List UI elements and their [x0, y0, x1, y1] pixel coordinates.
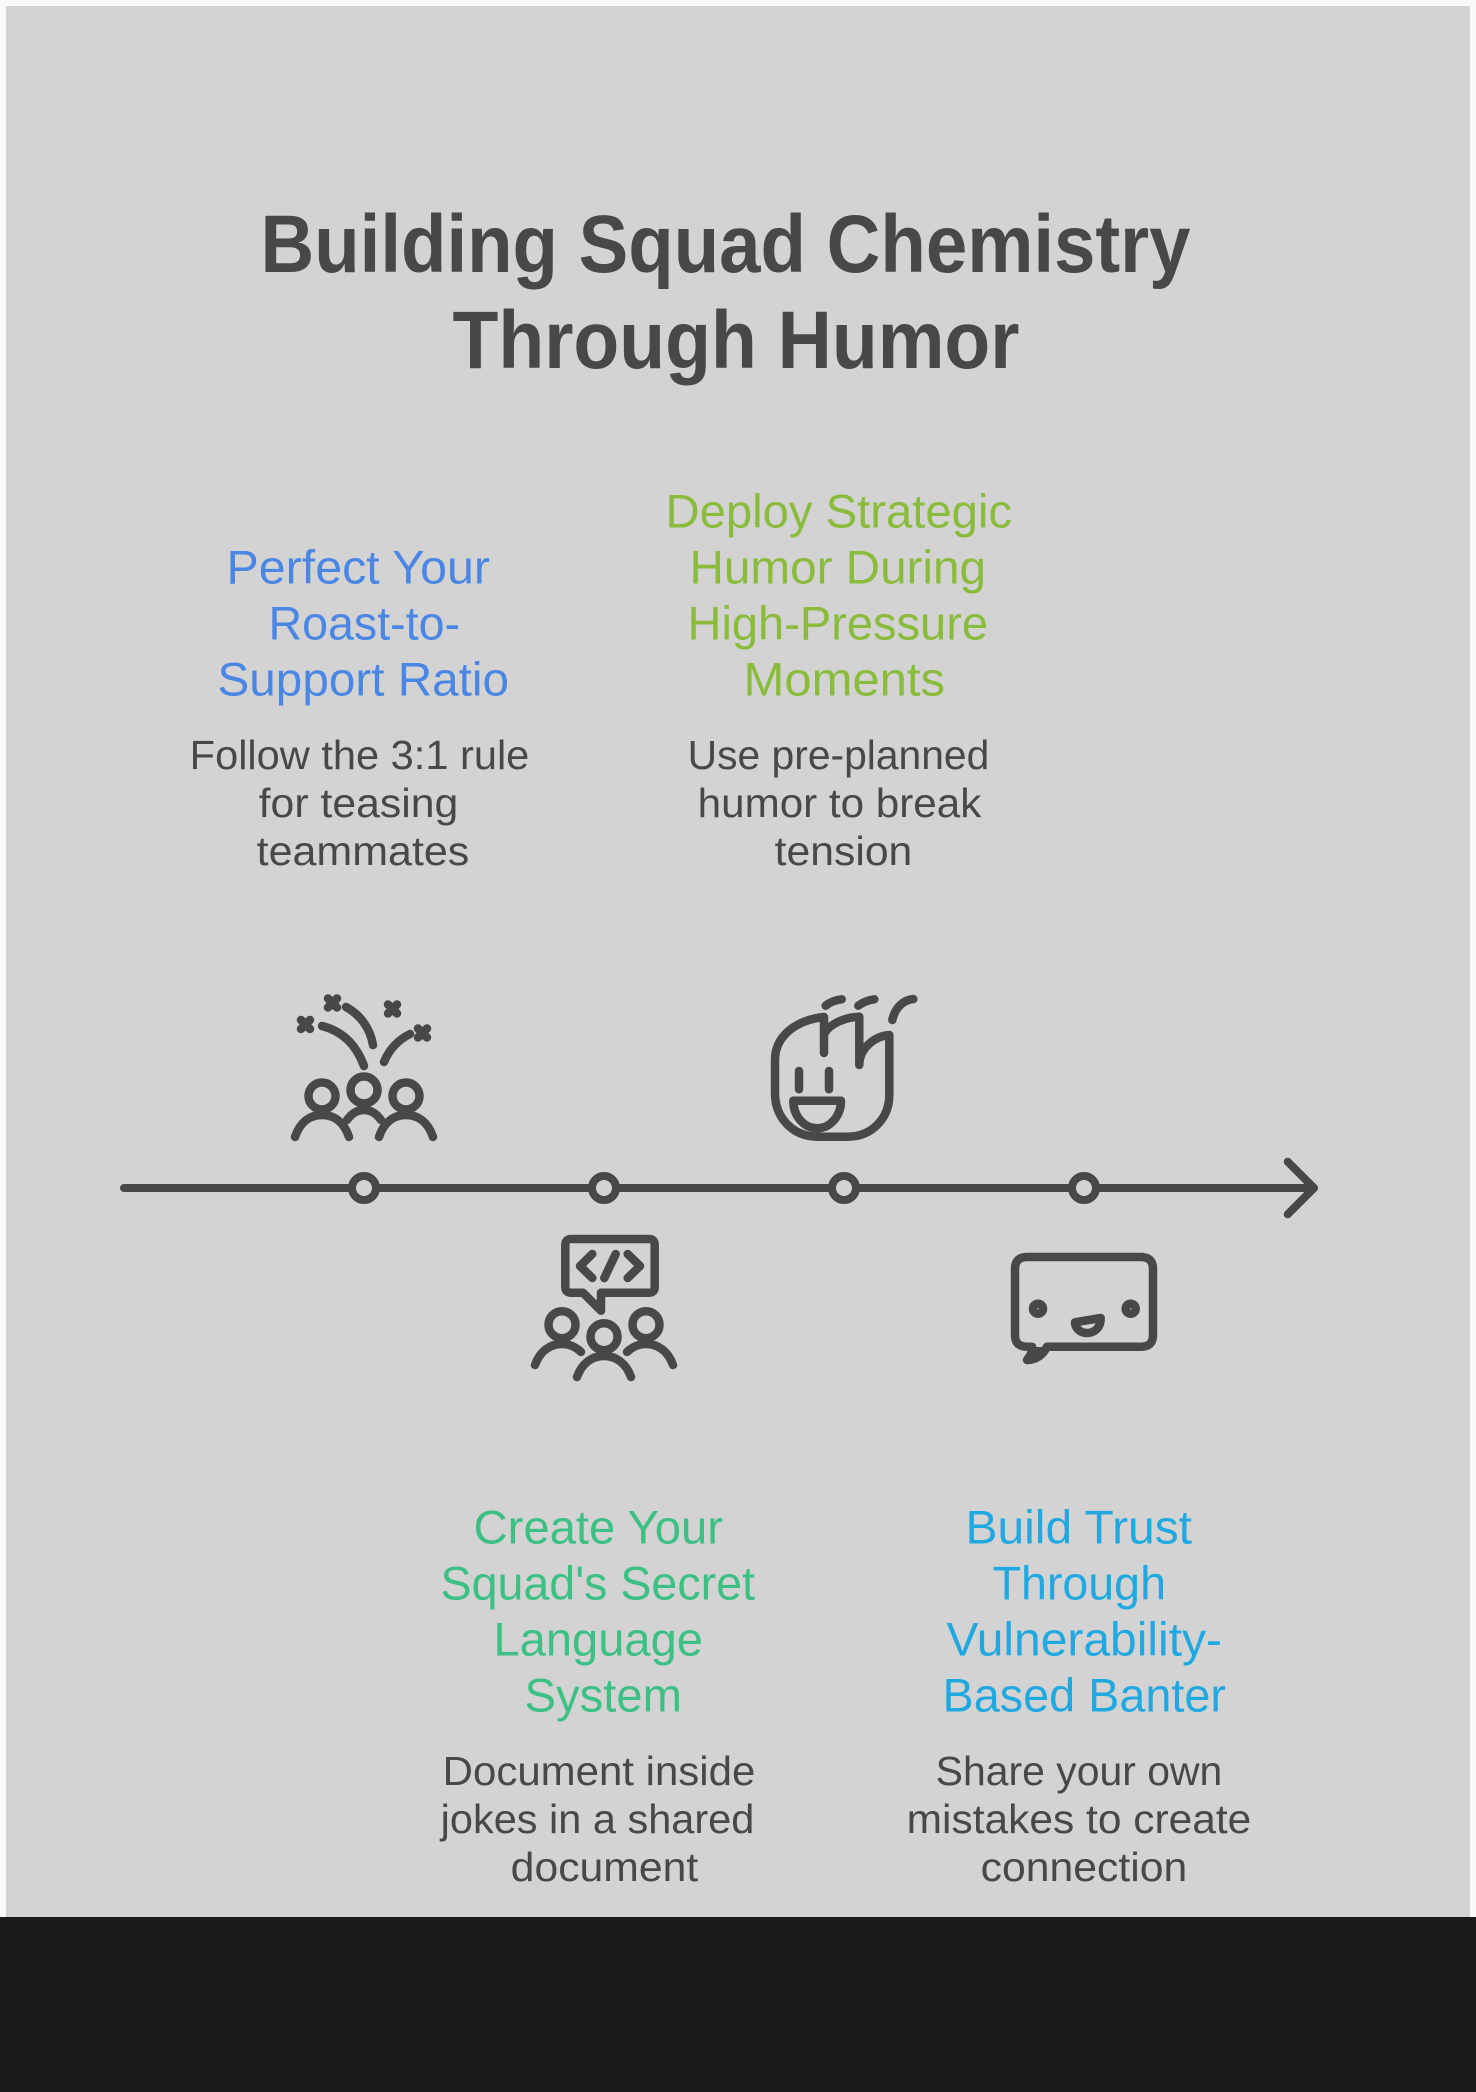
heading: step 3: High-Pressure [688, 598, 988, 650]
icon: laughing flame face [775, 999, 913, 1137]
text: step 2 description: Document inside [443, 1748, 755, 1794]
footer: dark band [0, 1917, 1476, 2092]
title: Through Humor [452, 295, 1020, 386]
heading: step 4: Build Trust [966, 1502, 1192, 1554]
heading: step 3: Moments [744, 654, 945, 706]
text: step 2 description [440, 1748, 755, 1890]
heading: step 2: System [524, 1670, 682, 1722]
title: Building Squad Chemistry [260, 199, 1191, 290]
heading: step 3: Humor During [690, 542, 986, 594]
icon: team with code speech bubble [535, 1239, 673, 1377]
heading: step 1: Roast-to- [268, 598, 460, 650]
timeline node 4 [1072, 1176, 1096, 1200]
panel: step 4 vulnerability banter [907, 1502, 1251, 1890]
text: step 3 description: tension [775, 828, 912, 874]
heading: step 4 [942, 1502, 1226, 1722]
text: step 1 description: Follow the 3:1 rule [190, 732, 529, 778]
heading: step 4: Through [992, 1558, 1166, 1610]
timeline node 2 [592, 1176, 616, 1200]
heading: step 1: Support Ratio [218, 654, 509, 706]
heading: step 2: Create Your [474, 1502, 723, 1554]
timeline node 1 [352, 1176, 376, 1200]
heading: step 4: Vulnerability- [946, 1614, 1222, 1666]
panel: step 2 secret language [440, 1502, 755, 1890]
icon: smiling chat bubble [1015, 1257, 1153, 1360]
text: step 3 description: humor to break [698, 780, 982, 826]
heading: step 2: Squad's Secret [440, 1558, 755, 1610]
text: step 4 description [907, 1748, 1251, 1890]
icon: group celebrating with fireworks [295, 998, 433, 1137]
text: step 3 description [688, 732, 989, 874]
text: step 1 description [190, 732, 529, 874]
text: step 4 description: connection [981, 1844, 1187, 1890]
heading: step 2 [440, 1502, 755, 1722]
heading: step 3: Deploy Strategic [666, 486, 1012, 538]
heading: step 4: Based Banter [942, 1670, 1226, 1722]
text: step 3 description: Use pre-planned [688, 732, 989, 778]
title [260, 199, 1191, 386]
heading: step 1: Perfect Your [226, 542, 490, 594]
text: step 2 description: jokes in a shared [440, 1796, 754, 1842]
heading: step 1 [218, 542, 509, 706]
panel: step 1 roast-to-support [190, 542, 529, 874]
heading: step 3 [666, 486, 1012, 706]
text: step 1 description: for teasing [259, 780, 458, 826]
text: step 4 description: Share your own [936, 1748, 1222, 1794]
timeline node 3 [832, 1176, 856, 1200]
timeline axis with arrow [124, 1162, 1314, 1214]
heading: step 2: Language [494, 1614, 703, 1666]
text: step 2 description: document [511, 1844, 698, 1890]
text: step 1 description: teammates [257, 828, 469, 874]
panel: step 3 strategic humor [666, 486, 1012, 874]
text: step 4 description: mistakes to create [907, 1796, 1251, 1842]
